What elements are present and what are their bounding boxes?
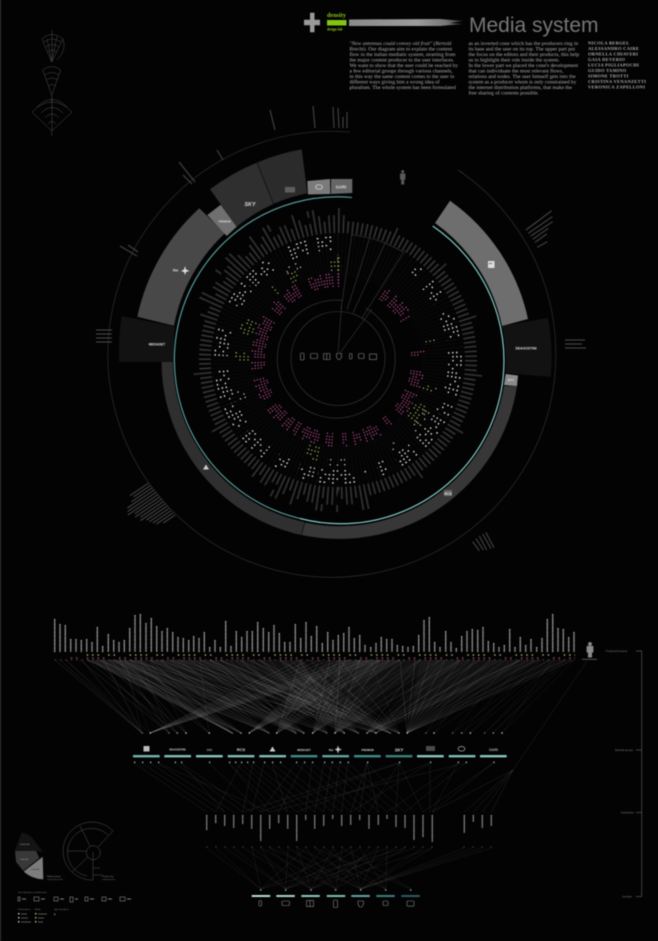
intro text column 2: the internet distribution platforms, that make the [468, 84, 573, 91]
legend icons [18, 897, 125, 902]
product labels [205, 227, 471, 493]
level scale on right: Products/Contents [606, 649, 628, 653]
interface dots [260, 889, 412, 891]
green dots [236, 258, 440, 462]
editors dots row [142, 732, 503, 734]
sector: Rai [137, 208, 225, 326]
author credits: CRISTINA VENANZETTI [588, 79, 646, 84]
sector: Mondo: MTV [508, 378, 514, 382]
author credits: ORNELLA CHIAVERI [588, 52, 638, 56]
level scale on right: Distribution [621, 810, 635, 814]
streak [349, 19, 463, 26]
density meter [327, 20, 346, 26]
sector: oval group [307, 179, 330, 194]
sector: Gari [331, 179, 352, 194]
legend: keys: Media [35, 909, 41, 911]
editorial group logos: DEAGOSTINI [169, 748, 186, 752]
base ticks [55, 659, 575, 661]
distribution tick row [206, 846, 492, 848]
sector: Mondo [504, 374, 518, 386]
author credits: NICOLA BERGEL [588, 40, 630, 46]
legend: ring chart [63, 822, 115, 881]
intro text column 2: system as a producer whom is only constrained by [468, 79, 577, 85]
links [55, 660, 574, 733]
intro text column 2: relations and nodes. The user himself gets into the [468, 73, 576, 80]
level scale on right: Editorial groups [615, 748, 634, 752]
sector: Mediaset Premium: PREMIUM [219, 220, 230, 224]
intro text column 2: us to highlight their role inside the system. [468, 57, 560, 63]
sector: Mediaset: MEDIASET [149, 342, 165, 346]
legend: keys: Type of products [54, 908, 69, 911]
level scale on right [606, 649, 642, 898]
intro text column 1: in this way the same content comes to the user in [350, 74, 455, 80]
intro text column 1: pluralism. The whole system has been formulated [350, 84, 456, 91]
longer product labels [199, 208, 370, 512]
cyan interface ring [174, 197, 504, 524]
author credits: ALESSANDRO CAIRE [588, 46, 639, 51]
sector: Mediaset [119, 316, 175, 362]
network: products to editors [55, 660, 575, 733]
white dots inner rows [233, 255, 443, 465]
intro text column 2: the focus on the editors and their products, this help [468, 51, 580, 58]
editorial group logos: PREMIUM [361, 748, 374, 752]
intro text column 1: We want to show that the user could be reached by [350, 63, 458, 69]
distribution channel labels [207, 815, 491, 842]
legend: ring chart: reading direction [102, 878, 115, 881]
legend: wedge chart [15, 832, 63, 881]
density wordmark: density [327, 12, 347, 19]
legend: keys [18, 891, 131, 922]
legend: wedge chart: weighted by income [47, 878, 63, 881]
editorial group logos: SKY [395, 748, 405, 752]
radial dots and label rings [190, 212, 486, 508]
icon: plus sign [304, 13, 320, 32]
sparse long labels [196, 218, 480, 502]
intro text column 1: flow in the italian mediatic system, strarting from [350, 51, 456, 58]
sector: Mediaset Premium [207, 205, 237, 236]
interface icons [259, 900, 414, 908]
legend: ring chart: Circular map [102, 876, 114, 878]
intro text column 1: "New antennas could convey old fruit" (Bertold [350, 40, 452, 47]
sector: RCS [302, 386, 517, 539]
editorial group logos [144, 746, 498, 754]
intro text column 1: Brecht). Our diagram aim to explain the content [350, 45, 453, 52]
pink dots row [71, 657, 575, 659]
icon: user top [400, 170, 405, 184]
pink dots [252, 274, 424, 446]
intro text column 1: a few editorial groups through various channels, [350, 67, 453, 74]
author credits [588, 40, 646, 90]
author credits: SIMONE TROTTI [588, 74, 629, 78]
sector: De Agostini [502, 318, 552, 377]
intro text column 2: its base and the user on its top. The upper part put [468, 46, 575, 52]
network: distribution to interfaces [207, 848, 491, 889]
title: Media system [469, 14, 599, 37]
editorial group logos: GARI [489, 748, 498, 752]
user icon lower [582, 642, 597, 659]
legend: wedge chart: 10,000,000 [20, 844, 29, 846]
editorial group logos: MEDIASET [297, 748, 311, 752]
white dots outer rows [215, 237, 461, 483]
legend: wedge chart: 5,000,000 [20, 859, 28, 861]
interface bars [252, 895, 420, 897]
small cone diagrams top left [32, 30, 72, 136]
intro text column 1: different ways giving him a wrong idea of [350, 78, 440, 85]
circular diagram [96, 106, 586, 577]
author credits: LUCIA PIGLIAPOCHI [588, 62, 639, 68]
intro text column 1 [350, 40, 458, 91]
sector: Telecom [257, 149, 307, 204]
header [304, 12, 646, 96]
author credits: VERONICA ZAPELLONI [588, 84, 645, 90]
legend: wedge chart: Editorial groups [47, 875, 61, 878]
level scale on right: Interface [622, 894, 633, 898]
product bars row [55, 614, 597, 660]
yellow dots row [87, 654, 575, 656]
intro text column 2: In the lower part we placed the cone's development [468, 63, 579, 69]
editorial group logos: Rai [329, 748, 333, 752]
sector: RCS: RCS [444, 492, 452, 496]
network: editors to distribution [134, 763, 493, 812]
intro text column 2 [468, 41, 580, 96]
design lab wordmark: design lab [327, 28, 342, 32]
faint spokes [233, 255, 443, 465]
sector: Gari: GARI [336, 184, 346, 190]
outer group labels [96, 106, 586, 551]
sector: Editoriale L'Espresso [435, 201, 528, 326]
density haze [87, 660, 575, 733]
sector: Arnoldo Mondadori [162, 362, 304, 535]
editorial group dots [134, 761, 495, 763]
intro text column 2: that can individuate the most relevant flows, [468, 67, 563, 74]
outer thin ring [108, 131, 556, 577]
legend key colours [22, 898, 131, 900]
product label columns [55, 614, 574, 652]
user to distribution links [432, 661, 587, 812]
intro text column 2: as an inverted cone which has the producers ring in [468, 41, 578, 47]
legend: keys: Print products [18, 908, 30, 911]
inner rings and wedge [277, 234, 405, 418]
author credits: GAIA DEVERIO [588, 57, 625, 62]
sector: Rai: Rai [173, 268, 178, 272]
sector: De Agostini: DEAGOSTINI [515, 346, 537, 350]
sector: Sky [210, 163, 273, 227]
sector: Sky: SKY [244, 202, 256, 208]
editorial group bars [133, 755, 507, 757]
editorial group logos: RCS [237, 747, 246, 752]
legend: wedge chart: 1,000,000 [31, 869, 39, 871]
editorial group logos: mtv [207, 748, 213, 752]
author credits: GUIDO TAMINO [588, 68, 627, 73]
intro text column 1: the major content producer to the user interfaces. [350, 56, 454, 63]
legend: keys: User (interfaces and devices) [18, 891, 47, 894]
intro text column 2: free sharing of contents possible. [468, 89, 539, 96]
interface icons centre [300, 353, 376, 360]
